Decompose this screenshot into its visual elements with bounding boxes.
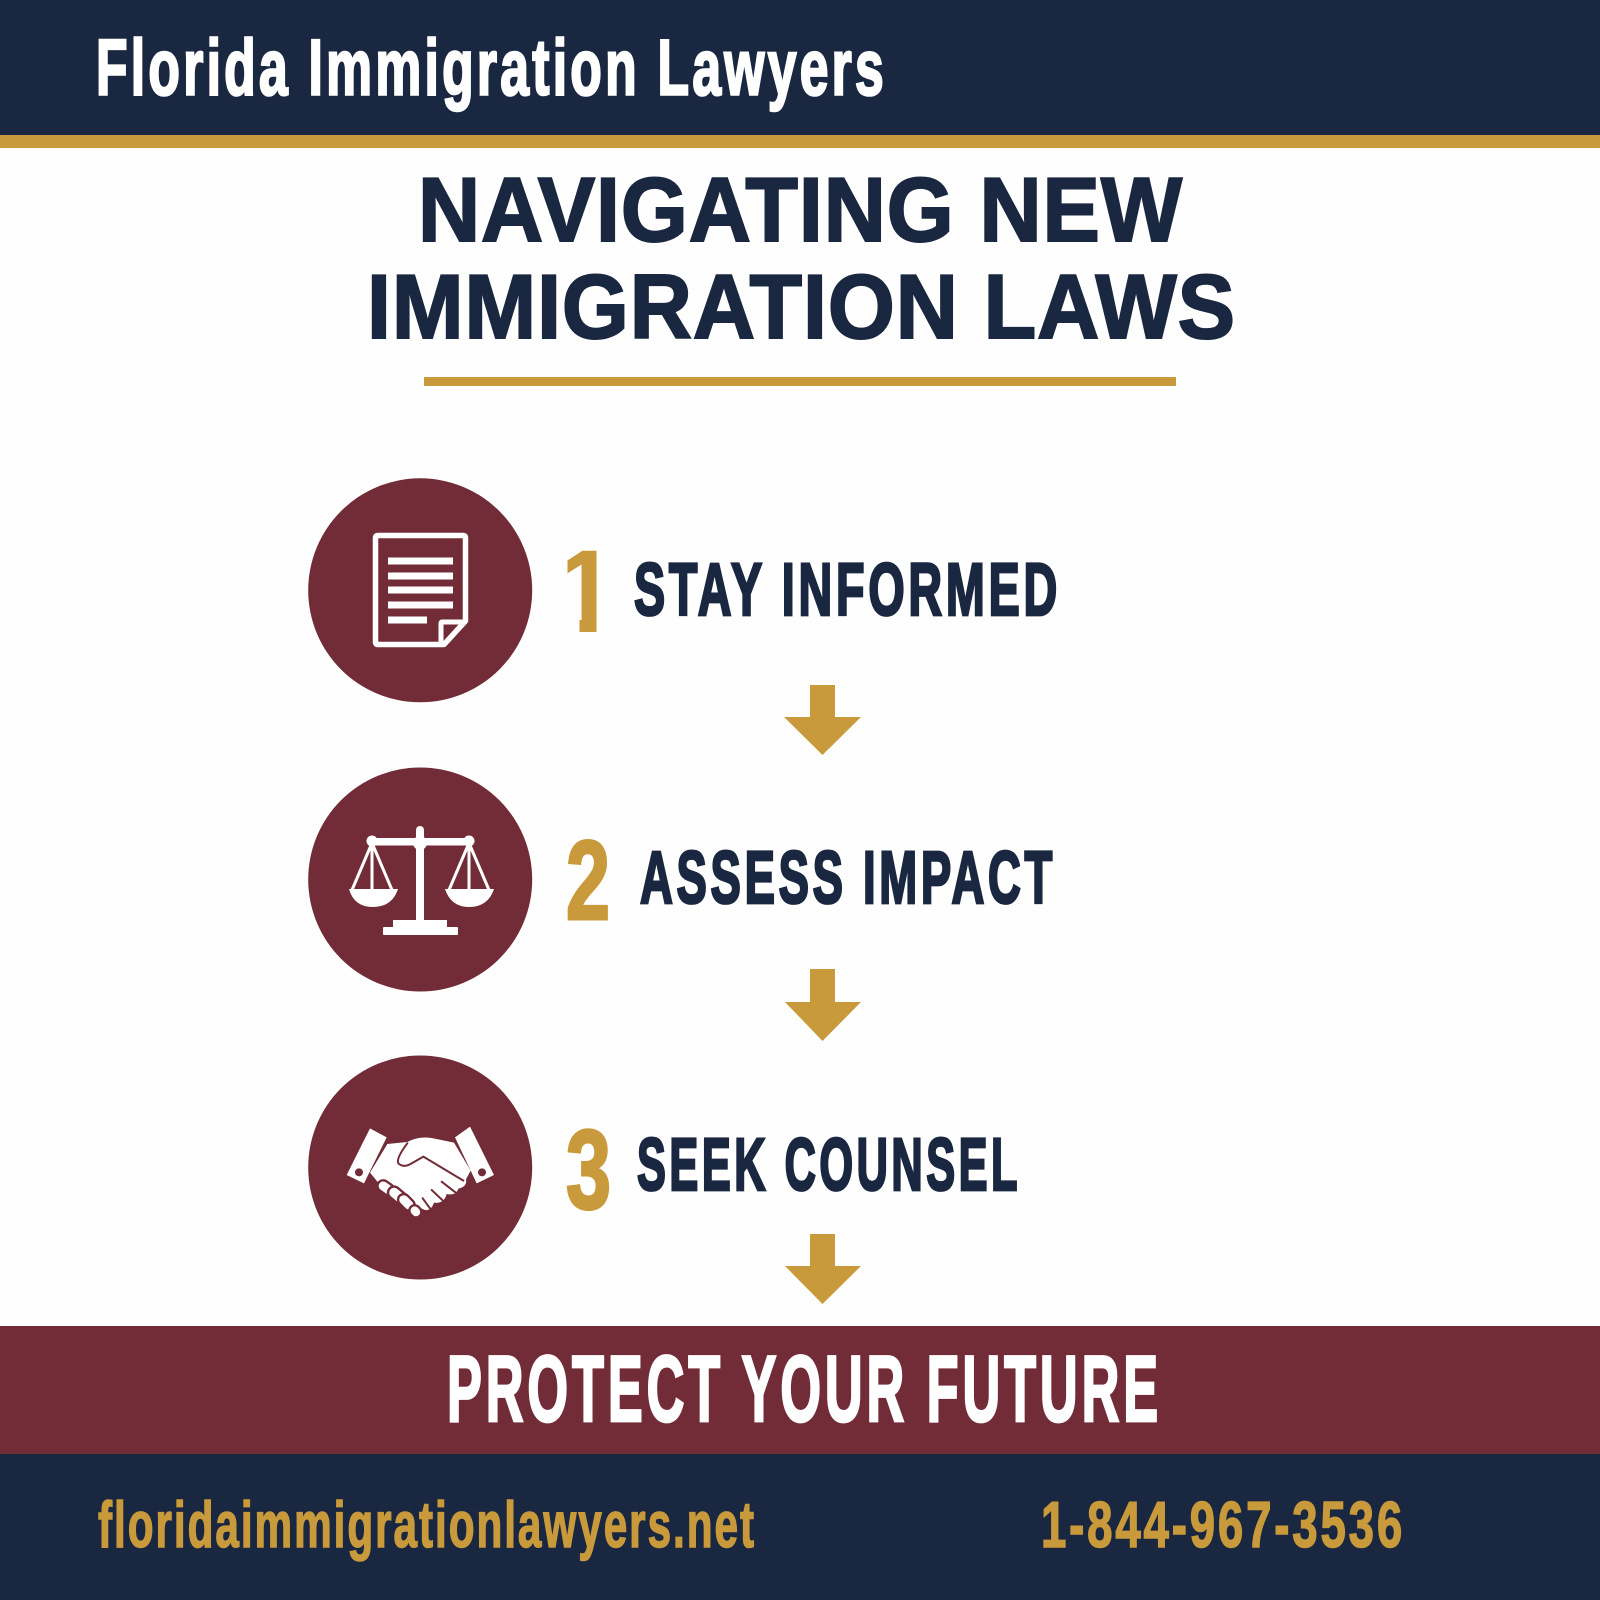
header band xyxy=(0,0,1600,148)
step 2: assess impact xyxy=(308,768,1056,992)
step 3: seek counsel xyxy=(308,1056,1021,1280)
title: IMMIGRATION LAWS xyxy=(367,257,1236,358)
icon: document xyxy=(308,478,532,702)
firm name: Florida Immigration Lawyers xyxy=(96,22,887,112)
arrow 2 xyxy=(785,969,861,1041)
title xyxy=(367,160,1236,386)
icon: handshake xyxy=(308,1056,532,1280)
step label: STAY INFORMED xyxy=(634,548,1061,631)
step label: SEEK COUNSEL xyxy=(637,1123,1021,1206)
title: NAVIGATING NEW xyxy=(418,160,1183,261)
number 2: 2 xyxy=(566,818,610,943)
icon: scales of justice xyxy=(308,768,532,992)
number 1: 1 xyxy=(554,526,620,658)
number 3: 3 xyxy=(566,1107,611,1232)
step label: ASSESS IMPACT xyxy=(640,836,1056,919)
footer xyxy=(0,1454,1600,1600)
phone number: 1-844-967-3536 xyxy=(1041,1488,1405,1561)
arrow 1 xyxy=(784,685,861,755)
website: floridaimmigrationlawyers.net xyxy=(98,1488,756,1561)
banner: protect your future xyxy=(0,1326,1600,1454)
arrow 3 xyxy=(785,1234,861,1304)
step 1: stay informed xyxy=(308,478,1061,702)
